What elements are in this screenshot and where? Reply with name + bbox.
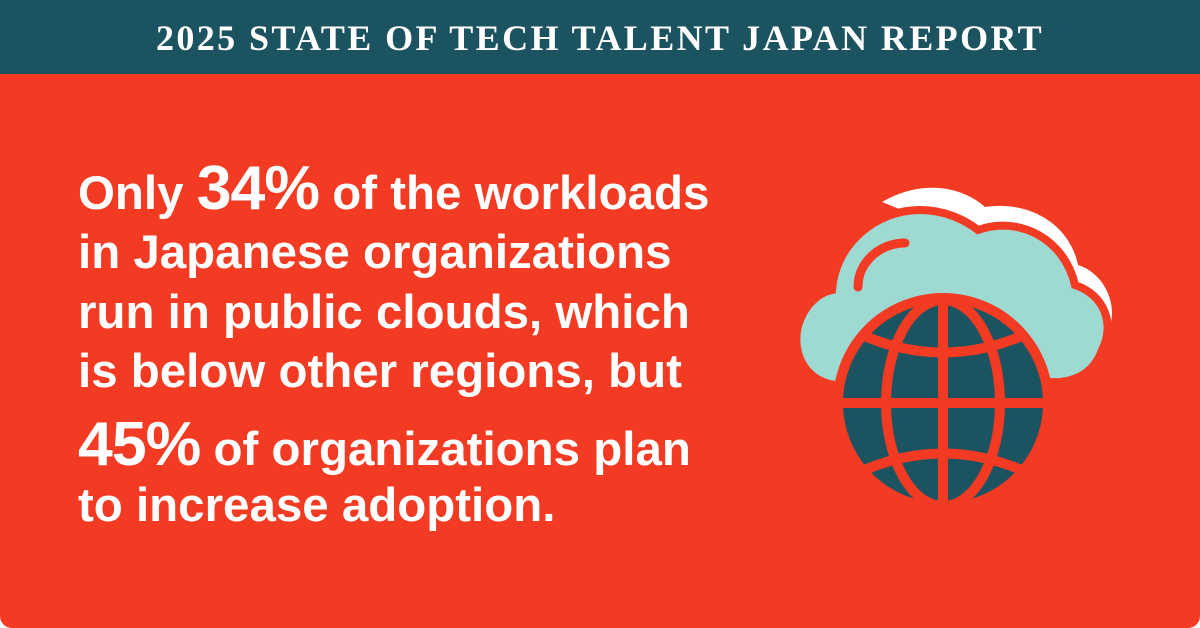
body text [78, 154, 709, 531]
line 6: to increase adoption. [78, 478, 555, 531]
front teal cloud [796, 210, 1108, 385]
line 4: is below other regions, but [78, 344, 682, 397]
line 3: run in public clouds, which [78, 285, 690, 338]
cloud highlight arc [858, 243, 905, 287]
line 1: Only 34% of the workloads [78, 154, 709, 223]
title bar [0, 0, 1200, 74]
line 2: in Japanese organizations [78, 225, 672, 278]
back white cloud [882, 188, 1112, 345]
globe [833, 293, 1053, 513]
line 5: 45% of organizations plan [78, 410, 691, 479]
title bar: 2025 STATE OF TECH TALENT JAPAN REPORT [156, 18, 1044, 58]
